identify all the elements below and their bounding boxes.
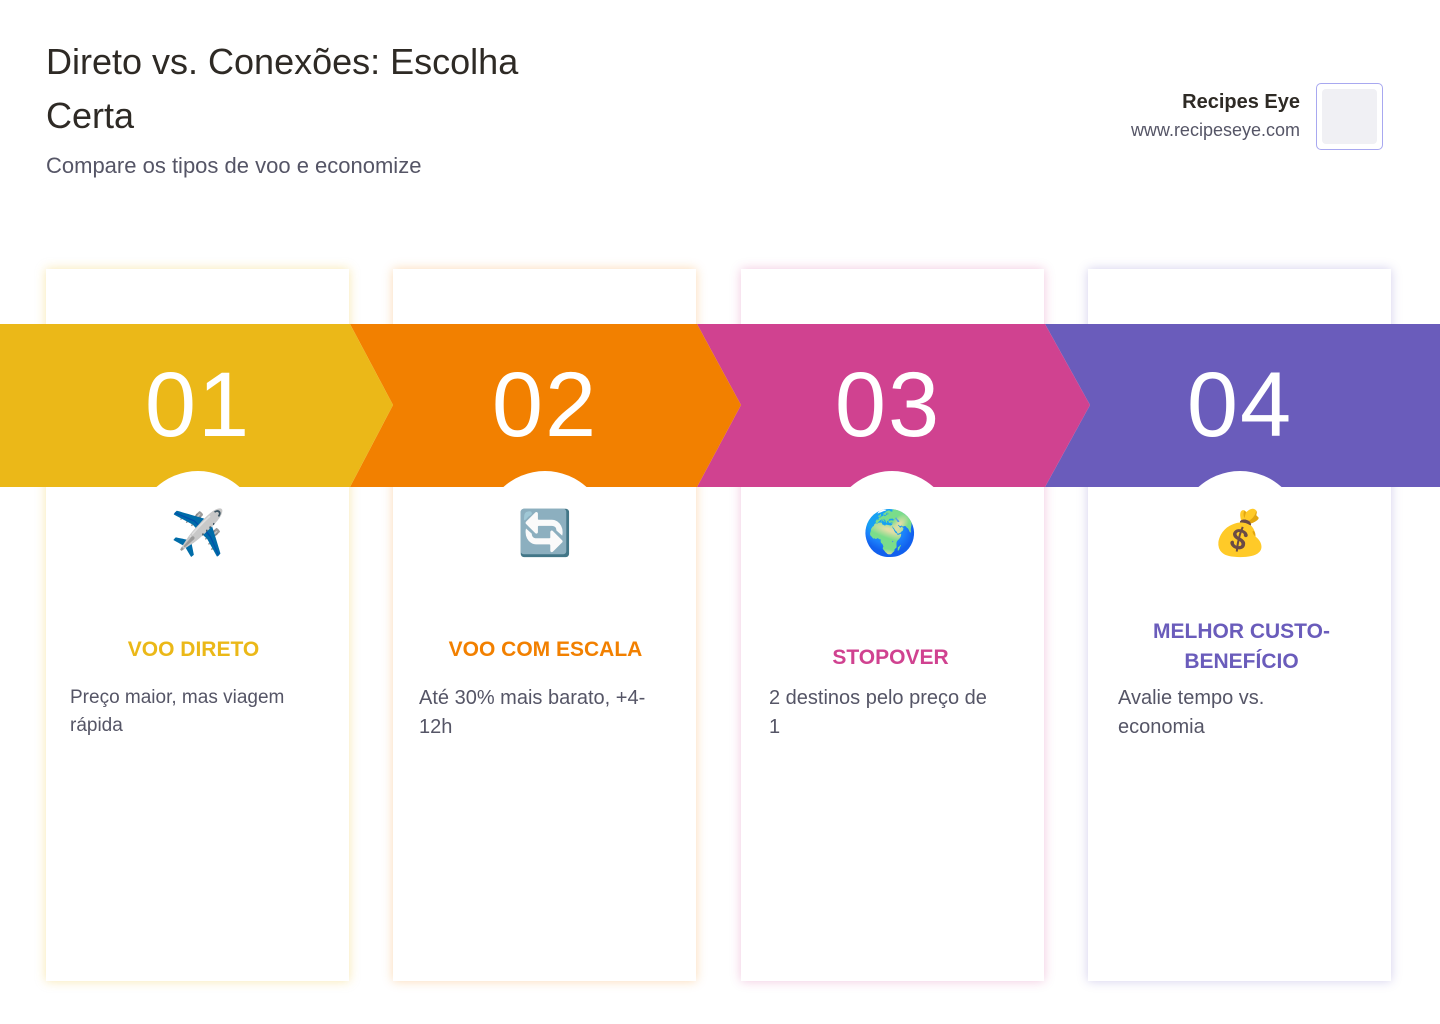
brand: www.recipeseye.com (1131, 120, 1300, 140)
brand: Recipes Eye (1182, 91, 1300, 113)
icon: globe: 🌍 (863, 507, 917, 559)
icon: arrows: 🔄 (518, 507, 572, 559)
heading 3: STOPOVER (832, 646, 949, 669)
brand (1131, 83, 1383, 150)
number 02: 02 (492, 354, 598, 456)
number 01: 01 (145, 354, 251, 456)
number 03: 03 (835, 354, 941, 456)
card 1 (46, 269, 349, 981)
card 2 (393, 269, 696, 981)
text 3: 2 destinos pelo preço de 1 (769, 687, 987, 738)
heading 2: VOO COM ESCALA (449, 638, 642, 661)
card 3 (741, 269, 1044, 981)
icon: plane: ✈️ (171, 507, 225, 559)
title: Direto vs. Conexões: Escolha Certa (46, 41, 518, 136)
text 1: Preço maior, mas viagem rápida (70, 687, 284, 736)
card 4 (1088, 269, 1391, 981)
heading 4: BENEFÍCIO (1184, 650, 1299, 673)
heading 4: MELHOR CUSTO- (1153, 620, 1330, 643)
text 4: Avalie tempo vs. economia (1118, 687, 1264, 738)
heading 1: VOO DIRETO (128, 638, 259, 661)
text 2: Até 30% mais barato, +4-12h (419, 687, 645, 738)
subtitle: Compare os tipos de voo e economize (46, 153, 421, 178)
number 04: 04 (1187, 354, 1293, 456)
chevron band (0, 324, 1440, 487)
icon: money bag: 💰 (1213, 507, 1267, 559)
heading 4 (1153, 620, 1330, 673)
